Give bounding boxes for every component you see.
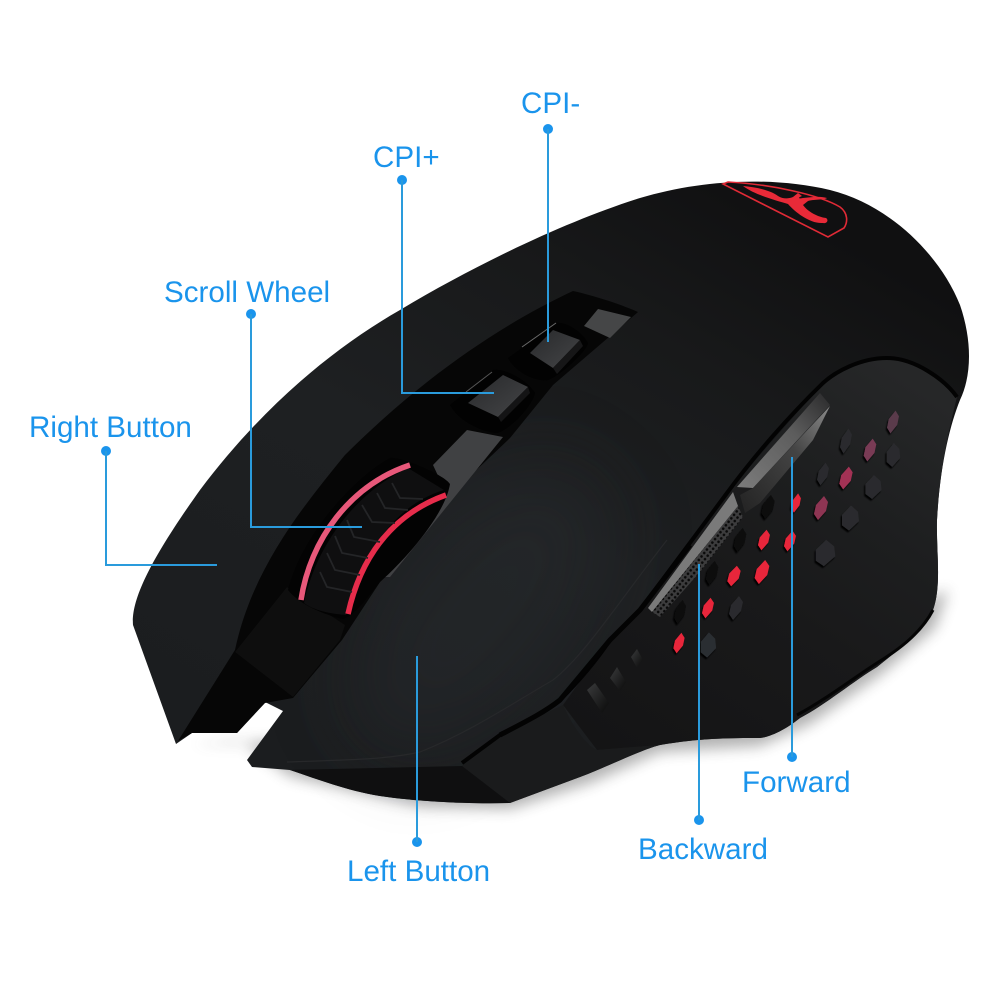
scroll wheel — [288, 458, 450, 619]
label: Forward: Forward — [742, 766, 851, 799]
mouse body — [133, 182, 969, 803]
label: Forward — [742, 457, 851, 799]
label: CPI+ — [373, 141, 494, 393]
lower front trim — [287, 766, 510, 803]
forward side button — [737, 393, 830, 513]
body highlight — [302, 422, 658, 798]
lower trim plate — [462, 705, 660, 803]
red grip hexagons — [673, 411, 899, 653]
tyre treads — [320, 483, 423, 592]
label: Right Button — [29, 411, 217, 565]
CPI+ button — [450, 370, 535, 433]
central strip — [178, 291, 638, 741]
red logo — [723, 182, 847, 237]
label: Left Button — [347, 656, 490, 888]
label: Backward: Backward — [638, 833, 768, 866]
strip gloss reflections — [584, 309, 631, 338]
label: CPI- — [521, 87, 580, 342]
strip lower matte section — [235, 587, 345, 697]
mouse illustration — [133, 182, 969, 803]
side grip panel — [563, 358, 957, 750]
label: CPI-: CPI- — [521, 87, 580, 120]
label: Backward — [638, 564, 768, 866]
wheel rim front — [348, 495, 446, 614]
label: CPI+: CPI+ — [373, 141, 440, 174]
bottom edge line — [797, 610, 933, 715]
label: Scroll Wheel: Scroll Wheel — [164, 276, 330, 309]
dark grip hexagons — [674, 428, 900, 658]
left button edge highlight — [287, 540, 667, 762]
wheel rim rear — [301, 465, 410, 600]
wheel tyre — [304, 468, 444, 615]
side vents — [587, 649, 643, 713]
label: Left Button: Left Button — [347, 855, 490, 888]
CPI- button — [508, 323, 588, 380]
mouse shadow — [190, 590, 948, 809]
label: Scroll Wheel — [164, 276, 362, 527]
groove between top shell and side panel — [462, 358, 957, 763]
backward side button — [648, 492, 743, 617]
wheel opening — [288, 458, 450, 619]
label: Right Button: Right Button — [29, 411, 192, 444]
